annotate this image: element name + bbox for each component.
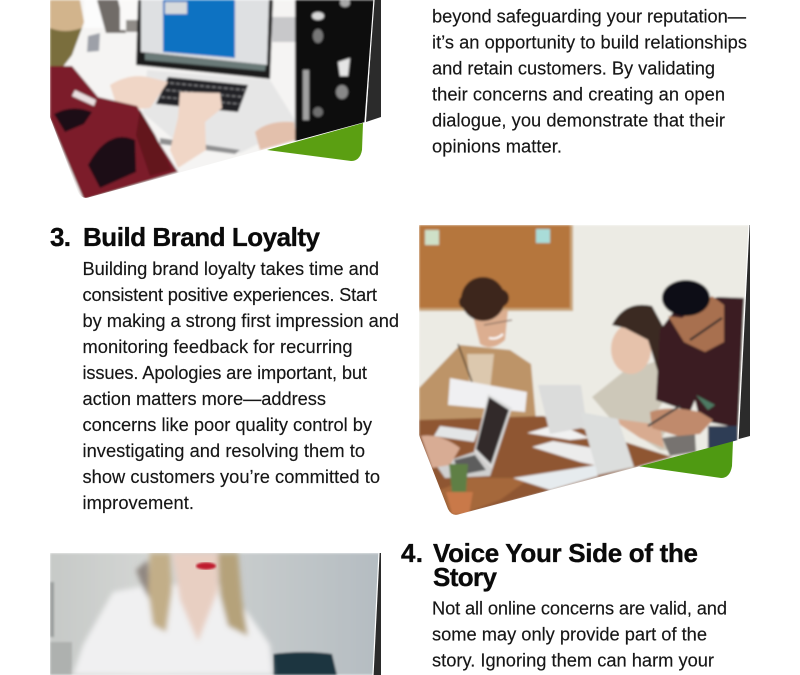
woman in beige sweater — [592, 361, 668, 451]
paragraph: end of section 2: and retain customers. By validating — [432, 58, 715, 78]
paragraph: section 4 body — [432, 598, 727, 670]
paragraph: section 4 body: story. Ignoring them can harm your — [432, 650, 714, 670]
green accent 2 — [637, 440, 733, 478]
woman with curly hair — [419, 345, 536, 420]
man with glasses — [656, 297, 744, 428]
laptop in the middle — [580, 412, 634, 475]
red plaid shirt — [50, 66, 178, 200]
neck — [172, 553, 218, 642]
paragraph: section 3 body: improvement. — [82, 492, 194, 513]
paragraph: section 3 body: consistent positive experiences. Start — [82, 284, 377, 305]
laptop on the left — [474, 394, 512, 470]
paragraph: end of section 2: opinions matter. — [432, 136, 562, 156]
hair — [50, 0, 85, 33]
cork board — [419, 225, 573, 311]
paragraph: end of section 2: dialogue, you demonstrate that their — [432, 110, 725, 130]
documents on table — [434, 426, 478, 442]
dark accent bar 2 — [735, 225, 750, 440]
heading: 4. Voice Your Side of the Story: Voice Your Side of the — [433, 538, 698, 568]
paragraph: section 3 body: Building brand loyalty takes time and — [82, 258, 379, 279]
paragraph: end of section 2: their concerns and creating an open — [432, 84, 725, 104]
paragraph: section 3 body — [82, 258, 399, 513]
green accent 1 — [267, 123, 363, 161]
paragraph: end of section 2 — [432, 6, 747, 156]
dark accent bar 3 — [373, 553, 381, 675]
tablet — [538, 385, 587, 434]
white separator line 3 — [373, 553, 379, 675]
paragraph: section 3 body: show customers you’re committed to — [82, 466, 380, 487]
white shirt — [73, 585, 273, 675]
paragraph: section 3 body: concerns like poor quality control by — [82, 414, 373, 435]
heading: 4. Voice Your Side of the Story — [401, 538, 698, 592]
paragraph: section 4 body: some may only provide part of the — [432, 624, 707, 644]
paragraph: section 3 body: investigating and resolving them to — [82, 440, 365, 461]
paragraph: section 3 body: monitoring feedback for recurring — [82, 336, 352, 357]
laptop lid — [136, 0, 273, 79]
laptop base — [143, 70, 298, 153]
paragraph: section 3 body: action matters more—address — [82, 388, 326, 409]
heading: 4. Voice Your Side of the Story: 4. — [401, 538, 423, 568]
table — [419, 416, 672, 518]
paper held — [448, 378, 527, 412]
hands and arms — [110, 76, 168, 110]
paragraph: section 3 body: by making a strong first impression and — [82, 310, 399, 331]
paragraph: section 3 body: issues. Apologies are important, but — [82, 362, 367, 383]
paragraph: end of section 2: it’s an opportunity to build relationships — [432, 32, 747, 52]
hair — [136, 560, 150, 600]
white separator line 2 — [738, 225, 749, 440]
photo 3: woman in white shirt — [50, 553, 382, 675]
heading: 4. Voice Your Side of the Story: Story — [433, 562, 498, 592]
photo 1: person typing on a laptop — [50, 0, 381, 200]
keyboard — [156, 77, 248, 112]
red lips — [196, 562, 216, 570]
cactus in pot — [449, 464, 468, 493]
dark accent bar 1 — [366, 0, 381, 122]
dark right side — [295, 0, 375, 142]
paragraph: section 4 body: Not all online concerns are valid, and — [432, 598, 727, 618]
photo 2: team meeting around a table — [419, 225, 751, 520]
heading: 3. Build Brand Loyalty: 3. — [50, 222, 71, 252]
dark chair — [273, 652, 337, 675]
white separator line 1 — [365, 0, 374, 122]
heading: 3. Build Brand Loyalty: Build Brand Loyalty — [83, 222, 321, 252]
paragraph: end of section 2: beyond safeguarding your reputation— — [432, 6, 747, 26]
